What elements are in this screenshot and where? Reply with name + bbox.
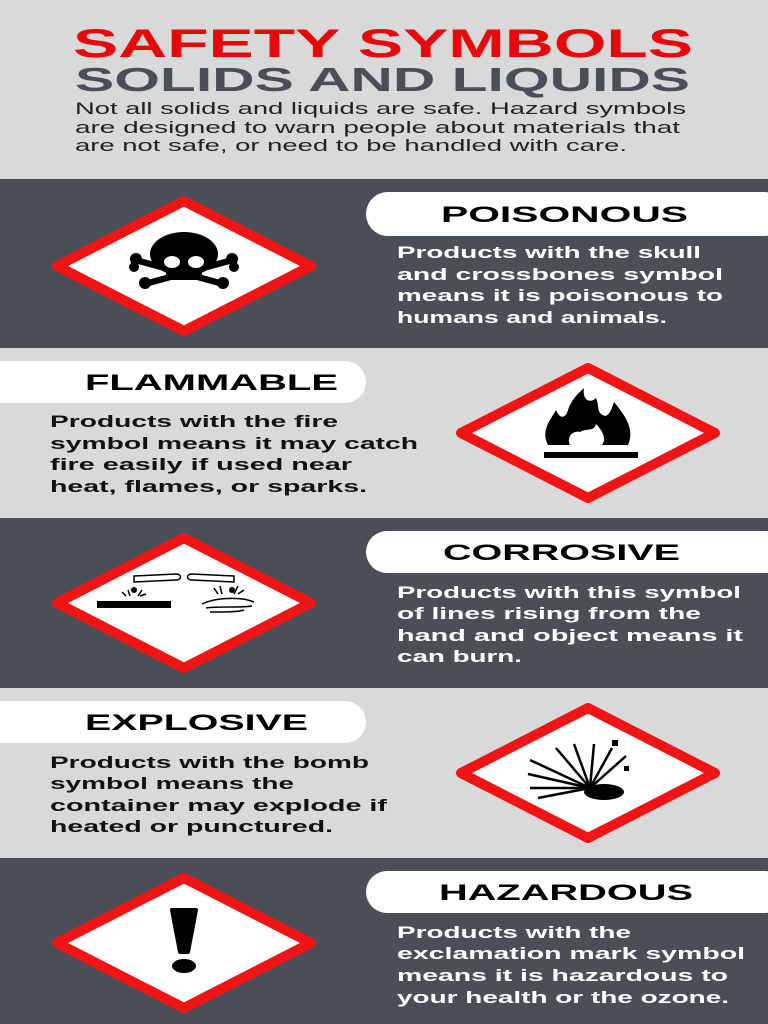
text: corrosive description (397, 583, 744, 666)
icon: corrosive diamond (57, 538, 311, 668)
text: flammable description: Products with the fire (50, 412, 338, 431)
text: poisonous description (397, 243, 723, 327)
text: poisonous description: means it is poisonous to (397, 286, 723, 305)
text: explosive description: heated or punctured. (50, 817, 333, 836)
text: hazardous description: exclamation mark symbol (397, 944, 745, 963)
text: flammable description: symbol means it may catch (50, 434, 418, 453)
text: hazardous description (397, 923, 745, 1007)
text: hazardous description: Products with the (397, 923, 631, 942)
icon: exclamation diamond (57, 878, 311, 1008)
label pill: FLAMMABLE (0, 361, 366, 403)
text: explosive description (50, 753, 388, 836)
text: flammable description: fire easily if used near (50, 455, 353, 474)
label pill: EXPLOSIVE (0, 701, 366, 743)
text: corrosive description: hand and object means it (397, 626, 744, 645)
text: hazardous description: your health or the ozone. (397, 988, 729, 1007)
label pill: CORROSIVE: CORROSIVE (443, 540, 680, 565)
text: poisonous description: Products with the skull (397, 243, 701, 262)
label pill: POISONOUS (366, 192, 768, 236)
text: poisonous description: and crossbones symbol (397, 265, 723, 284)
title: SAFETY SYMBOLS (73, 22, 693, 66)
icon: explosive diamond (461, 708, 715, 838)
panel: flammable (0, 348, 768, 518)
intro text: are designed to warn people about materials that (75, 118, 680, 137)
label pill: FLAMMABLE: FLAMMABLE (85, 370, 338, 395)
panel: hazardous (0, 858, 768, 1024)
subtitle: SOLIDS AND LIQUIDS (75, 61, 690, 98)
icon: flame diamond (461, 368, 715, 498)
intro text (75, 99, 686, 155)
label pill: CORROSIVE (366, 531, 768, 573)
panel: corrosive (0, 518, 768, 688)
text: explosive description: Products with the bomb (50, 753, 369, 772)
icon: skull diamond (57, 201, 311, 331)
label pill: HAZARDOUS: HAZARDOUS (439, 880, 693, 905)
text: flammable description: heat, flames, or sparks. (50, 477, 367, 496)
text: explosive description: container may explode if (50, 796, 388, 815)
panel: poisonous (0, 179, 768, 348)
text: flammable description (50, 412, 418, 496)
intro text: Not all solids and liquids are safe. Hazard symbols (75, 99, 686, 118)
label pill: HAZARDOUS (366, 871, 768, 913)
text: corrosive description: Products with this symbol (397, 583, 741, 602)
text: hazardous description: means it is hazardous to (397, 966, 728, 985)
text: corrosive description: can burn. (397, 647, 522, 666)
label pill: POISONOUS: POISONOUS (441, 202, 688, 227)
header (73, 22, 693, 155)
text: explosive description: symbol means the (50, 774, 294, 793)
panel: explosive (0, 688, 768, 858)
intro text: are not safe, or need to be handled with care. (75, 136, 627, 155)
text: poisonous description: humans and animals. (397, 308, 667, 327)
text: corrosive description: of lines rising from the (397, 604, 701, 623)
label pill: EXPLOSIVE: EXPLOSIVE (85, 710, 308, 735)
